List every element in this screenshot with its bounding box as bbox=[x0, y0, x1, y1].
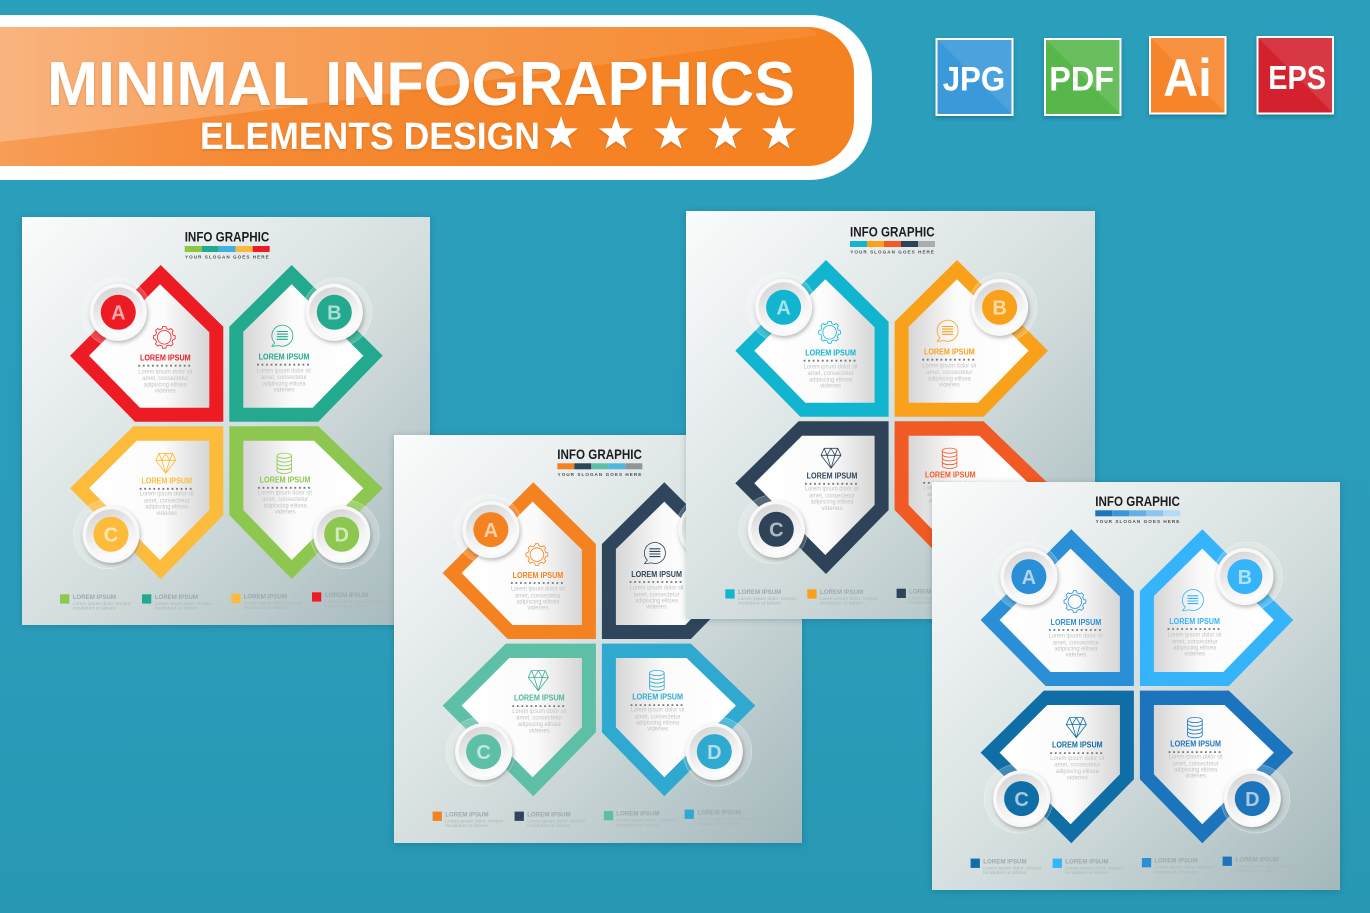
badge A bbox=[82, 278, 151, 347]
icon: gear bbox=[153, 326, 175, 348]
badge: EPS bbox=[1258, 37, 1333, 114]
card heading: INFO GRAPHIC bbox=[1095, 493, 1180, 509]
badge B bbox=[303, 278, 372, 347]
banner subheading: ELEMENTS DESIGN bbox=[200, 116, 540, 158]
petal C text: videnes bbox=[1067, 775, 1088, 781]
card heading: YOUR SLOGAN GOES HERE bbox=[185, 255, 269, 260]
legend: Lorem ipsum dolor, tempor bbox=[738, 596, 796, 601]
petal D text: amet, consectetur bbox=[262, 497, 308, 503]
petal C text: LOREM IPSUM bbox=[141, 476, 192, 485]
petal B text bbox=[922, 348, 977, 388]
petal D text bbox=[1169, 740, 1223, 780]
legend: LOREM IPSUM bbox=[73, 594, 116, 601]
legend bbox=[971, 856, 1294, 875]
legend: Lorem ipsum dolor, tempor bbox=[1154, 865, 1213, 870]
petal D bbox=[895, 421, 1048, 574]
petal A text: Lorem ipsum dolor sit bbox=[1049, 634, 1103, 640]
icon: database bbox=[277, 453, 292, 474]
legend: LOREM IPSUM bbox=[325, 592, 368, 599]
legend: LOREM IPSUM bbox=[1236, 856, 1279, 863]
petal A text: amet, consectetur bbox=[1053, 640, 1099, 646]
petal A text: Lorem ipsum dolor sit bbox=[138, 369, 193, 375]
legend: LOREM IPSUM bbox=[738, 589, 781, 596]
petal A text: Lorem ipsum dolor sit bbox=[804, 364, 858, 370]
icon: gear bbox=[819, 321, 840, 343]
badge B: B bbox=[1238, 567, 1252, 589]
badge C bbox=[739, 495, 808, 564]
petal B text: adipiscing elitsea bbox=[1173, 646, 1217, 652]
legend bbox=[725, 588, 967, 606]
icon: diamond bbox=[528, 671, 548, 691]
petal B text: LOREM IPSUM bbox=[924, 348, 975, 357]
petal C text bbox=[512, 694, 567, 734]
badge A bbox=[454, 495, 523, 564]
badge C: C bbox=[1014, 789, 1029, 811]
badge D: D bbox=[707, 742, 722, 764]
petal B text: videnes bbox=[646, 605, 667, 611]
legend: LOREM IPSUM bbox=[983, 858, 1027, 865]
icon: gear bbox=[526, 544, 548, 565]
petal D text: adipiscing elitsea bbox=[264, 503, 307, 509]
petal B text: Lorem ipsum dolor sit bbox=[630, 586, 684, 592]
icon: diamond bbox=[156, 453, 176, 473]
legend: Lorem ipsum dolor, tempor bbox=[983, 865, 1042, 870]
petal A bbox=[443, 482, 596, 639]
badge C bbox=[984, 764, 1053, 833]
petal B text: Lorem ipsum dolor sit bbox=[1168, 633, 1222, 639]
banner gloss bbox=[0, 27, 818, 142]
petal D text: videnes bbox=[274, 509, 296, 515]
petal B bbox=[1140, 529, 1293, 686]
petal C text: amet, consectetur bbox=[516, 716, 562, 722]
legend: incididunt ut labore bbox=[155, 606, 198, 611]
badge A bbox=[747, 273, 816, 342]
petal D text: amet, consectetur bbox=[635, 714, 681, 720]
petal C text: LOREM IPSUM bbox=[514, 694, 565, 703]
legend: incididunt ut labore bbox=[983, 870, 1027, 875]
petal A bbox=[981, 529, 1134, 686]
icon: speech bubble bbox=[272, 325, 293, 346]
legend: Lorem ipsum dolor, tempor bbox=[1236, 863, 1294, 868]
legend: LOREM IPSUM bbox=[1065, 858, 1109, 865]
petal A text: adipiscing elitsea bbox=[1054, 647, 1098, 653]
legend: incididunt ut labore bbox=[738, 601, 781, 606]
petal C text: amet, consectetur bbox=[1054, 763, 1100, 769]
petal A text: LOREM IPSUM bbox=[1051, 618, 1102, 627]
petal C text: LOREM IPSUM bbox=[1052, 741, 1103, 750]
petal B text: videnes bbox=[274, 387, 294, 393]
petal B text bbox=[1168, 617, 1222, 658]
badge A: A bbox=[484, 520, 498, 542]
legend: LOREM IPSUM bbox=[244, 593, 287, 600]
petal C text: Lorem ipsum dolor sit bbox=[512, 709, 567, 715]
petal D text: LOREM IPSUM bbox=[260, 475, 311, 484]
card heading bbox=[185, 229, 270, 260]
petal D text: amet, consectetur bbox=[1173, 761, 1219, 767]
petal A text: LOREM IPSUM bbox=[513, 571, 564, 580]
petal D text bbox=[631, 693, 685, 733]
panel: card 4 monochrome blue bbox=[932, 482, 1340, 890]
petal C text: adipiscing elitsea bbox=[810, 500, 854, 506]
badge C bbox=[446, 717, 515, 786]
legend: LOREM IPSUM bbox=[820, 589, 863, 596]
badge: EPS: EPS bbox=[1268, 59, 1326, 96]
badge D bbox=[1221, 764, 1290, 833]
petal B text: Lorem ipsum dolor sit bbox=[922, 363, 977, 369]
petal A text: videnes bbox=[155, 388, 176, 394]
petal A bbox=[735, 260, 889, 417]
badge C bbox=[74, 500, 142, 569]
badge D bbox=[683, 717, 752, 786]
badge A: A bbox=[776, 298, 791, 320]
legend: Lorem ipsum dolor, tempor bbox=[698, 816, 756, 821]
petal B text: videnes bbox=[1184, 652, 1205, 658]
badge D: D bbox=[334, 524, 349, 546]
petal A text bbox=[138, 354, 193, 394]
petal C bbox=[70, 426, 223, 579]
legend: LOREM IPSUM bbox=[909, 588, 952, 595]
badge B: B bbox=[327, 303, 342, 325]
petal D bbox=[1140, 691, 1293, 843]
legend: incididunt ut labore bbox=[1154, 869, 1198, 874]
petal C text bbox=[1050, 741, 1105, 781]
petal C text: amet, consectetur bbox=[809, 493, 855, 499]
petal C text: Lorem ipsum dolor sit bbox=[805, 487, 859, 493]
legend: incididunt ut labore bbox=[616, 822, 660, 827]
file format badges bbox=[934, 36, 1336, 120]
petal B bbox=[229, 265, 383, 422]
legend: incididunt ut labore bbox=[909, 600, 952, 605]
petal D text bbox=[258, 475, 312, 515]
badge B bbox=[1213, 542, 1282, 611]
badge A: A bbox=[1022, 567, 1036, 589]
legend: Lorem ipsum dolor, tempor bbox=[325, 599, 383, 604]
petal B bbox=[895, 260, 1048, 417]
petal A text: LOREM IPSUM bbox=[140, 354, 191, 363]
petal B text: adipiscing elitsea bbox=[928, 376, 971, 382]
five star rating bbox=[544, 116, 796, 149]
petal C text: Lorem ipsum dolor sit bbox=[140, 492, 194, 498]
legend: LOREM IPSUM bbox=[698, 809, 741, 816]
petal A text: LOREM IPSUM bbox=[805, 349, 856, 358]
icon: gear bbox=[1064, 591, 1086, 612]
petal D text: adipiscing elitsea bbox=[1174, 768, 1218, 774]
petal A text: adipiscing elitsea bbox=[144, 382, 187, 388]
icon: diamond bbox=[821, 448, 841, 468]
banner orange fill bbox=[0, 27, 854, 166]
petal A text: adipiscing elitsea bbox=[516, 600, 560, 606]
legend: Lorem ipsum dolor, tempor bbox=[445, 818, 504, 823]
legend bbox=[433, 809, 756, 828]
icon: database bbox=[1188, 717, 1202, 738]
petal A text: adipiscing elitsea bbox=[809, 377, 853, 383]
badge C: C bbox=[769, 519, 784, 541]
petal C text: videnes bbox=[156, 511, 177, 517]
petal B bbox=[602, 482, 755, 639]
card heading bbox=[850, 224, 935, 255]
badge: PDF bbox=[1045, 39, 1120, 115]
legend: incididunt ut labore bbox=[1065, 870, 1109, 875]
petal A bbox=[70, 265, 223, 422]
icon: database bbox=[942, 448, 957, 468]
petal D text: adipiscing elitsea bbox=[636, 721, 680, 727]
icon: diamond bbox=[1066, 718, 1086, 738]
petal B text: amet, consectetur bbox=[926, 370, 972, 376]
petal D text: Lorem ipsum dolor sit bbox=[923, 485, 978, 491]
badge B: B bbox=[992, 298, 1007, 320]
petal D text: videnes bbox=[940, 504, 961, 510]
legend: Lorem ipsum dolor, tempor bbox=[820, 596, 878, 601]
petal D text: LOREM IPSUM bbox=[925, 470, 976, 479]
petal B text: LOREM IPSUM bbox=[1169, 617, 1220, 626]
legend: incididunt ut labore bbox=[1236, 868, 1279, 873]
card heading: INFO GRAPHIC bbox=[185, 229, 269, 245]
card heading: YOUR SLOGAN GOES HERE bbox=[1096, 519, 1179, 524]
petal C text: adipiscing elitsea bbox=[518, 722, 561, 728]
petal D text: adipiscing elitsea bbox=[929, 498, 972, 504]
petal C text: adipiscing elitsea bbox=[1056, 769, 1099, 775]
badge: JPG bbox=[936, 39, 1012, 115]
petal A text bbox=[511, 571, 565, 612]
petal D bbox=[602, 644, 755, 796]
badge: PDF: PDF bbox=[1049, 60, 1114, 98]
petal C text bbox=[140, 476, 194, 517]
petal C text bbox=[805, 471, 860, 512]
legend: incididunt ut labore bbox=[325, 604, 368, 609]
petal D text: videnes bbox=[1185, 774, 1206, 780]
petal D text: Lorem ipsum dolor sit bbox=[631, 708, 685, 714]
badge D bbox=[310, 500, 379, 569]
card heading: INFO GRAPHIC bbox=[557, 446, 642, 462]
legend: incididunt ut labore bbox=[698, 821, 741, 826]
badge A: A bbox=[111, 303, 126, 325]
legend: LOREM IPSUM bbox=[155, 594, 198, 601]
petal B text bbox=[257, 353, 312, 393]
card heading: YOUR SLOGAN GOES HERE bbox=[850, 250, 934, 255]
legend: Lorem ipsum dolor, tempor bbox=[909, 595, 967, 600]
legend: Lorem ipsum dolor, tempor bbox=[244, 600, 302, 605]
icon: speech bubble bbox=[644, 542, 665, 564]
petal C text: videnes bbox=[529, 728, 550, 734]
petal B text: adipiscing elitsea bbox=[635, 599, 679, 605]
petal B text: LOREM IPSUM bbox=[631, 570, 682, 579]
petal D text: Lorem ipsum dolor sit bbox=[1169, 755, 1223, 761]
petal B text: amet, consectetur bbox=[1172, 639, 1218, 645]
petal B text: adipiscing elitsea bbox=[262, 381, 306, 387]
badge D: D bbox=[1245, 789, 1260, 811]
petal B text: LOREM IPSUM bbox=[259, 353, 310, 362]
banner white outline bbox=[0, 15, 872, 180]
icon: speech bubble bbox=[1182, 589, 1203, 611]
badge: Ai bbox=[1150, 37, 1226, 114]
petal B text: videnes bbox=[939, 382, 960, 388]
petal B text: amet, consectetur bbox=[634, 592, 680, 598]
icon: speech bubble bbox=[937, 320, 958, 341]
badge: JPG: JPG bbox=[943, 60, 1005, 98]
badge C: C bbox=[104, 524, 118, 546]
panel: card 1 red teal yellow green bbox=[22, 217, 430, 625]
petal C text: videnes bbox=[821, 506, 842, 512]
legend: Lorem ipsum dolor, tempor bbox=[1065, 865, 1124, 870]
petal D text: LOREM IPSUM bbox=[632, 693, 683, 702]
legend: incididunt ut labore bbox=[244, 605, 287, 610]
petal A text: videnes bbox=[820, 383, 841, 389]
banner: minimal infographics title bbox=[0, 15, 872, 180]
petal C text: LOREM IPSUM bbox=[807, 471, 858, 480]
petal D bbox=[229, 426, 383, 579]
legend: incididunt ut labore bbox=[527, 823, 571, 828]
legend bbox=[60, 592, 383, 611]
petal A text: amet, consectetur bbox=[515, 593, 561, 599]
legend: incididunt ut labore bbox=[445, 823, 489, 828]
banner heading: MINIMAL INFOGRAPHICS bbox=[47, 50, 795, 119]
petal D text: LOREM IPSUM bbox=[1170, 740, 1221, 749]
petal A text: videnes bbox=[1065, 653, 1086, 659]
petal D text bbox=[923, 470, 978, 510]
petal C bbox=[981, 691, 1134, 843]
legend: LOREM IPSUM bbox=[445, 811, 489, 818]
petal A text bbox=[804, 349, 858, 389]
badge A bbox=[992, 542, 1061, 611]
panel: card 2 orange navy mint blue bbox=[394, 435, 802, 843]
card heading bbox=[557, 446, 642, 477]
legend: Lorem ipsum dolor, tempor bbox=[527, 818, 586, 823]
panel: card 3 cyan amber navy vermilion bbox=[686, 211, 1095, 619]
petal B text: amet, consectetur bbox=[261, 375, 307, 381]
petal A text: videnes bbox=[527, 606, 548, 612]
petal B text bbox=[630, 570, 684, 611]
petal A text bbox=[1049, 618, 1103, 659]
legend: Lorem ipsum dolor, tempor bbox=[73, 601, 131, 606]
legend: LOREM IPSUM bbox=[616, 811, 660, 818]
badge B bbox=[675, 495, 744, 564]
badge B: B bbox=[700, 520, 714, 542]
badge B bbox=[968, 273, 1037, 342]
card heading: YOUR SLOGAN GOES HERE bbox=[558, 472, 641, 477]
petal D text: videnes bbox=[647, 727, 668, 733]
petal C bbox=[735, 421, 889, 574]
badge C: C bbox=[476, 742, 491, 764]
legend: incididunt ut labore bbox=[820, 601, 863, 606]
petal D text: Lorem ipsum dolor sit bbox=[258, 490, 312, 496]
petal A text: amet, consectetur bbox=[808, 371, 854, 377]
legend: LOREM IPSUM bbox=[1154, 858, 1198, 865]
petal D text: amet, consectetur bbox=[927, 492, 973, 498]
petal B text: Lorem ipsum dolor sit bbox=[257, 368, 311, 374]
petal A text: amet, consectetur bbox=[142, 376, 188, 382]
petal C text: amet, consectetur bbox=[144, 498, 190, 504]
petal C text: adipiscing elitsea bbox=[145, 505, 189, 511]
icon: database bbox=[650, 670, 664, 691]
petal C text: Lorem ipsum dolor sit bbox=[1050, 756, 1105, 762]
legend: Lorem ipsum dolor, tempor bbox=[155, 601, 213, 606]
legend: LOREM IPSUM bbox=[527, 811, 571, 818]
card heading bbox=[1095, 493, 1180, 524]
card heading: INFO GRAPHIC bbox=[850, 224, 935, 240]
petal C bbox=[443, 644, 596, 796]
badge: Ai: Ai bbox=[1163, 49, 1212, 108]
legend: Lorem ipsum dolor, tempor bbox=[616, 818, 675, 823]
legend: incididunt ut labore bbox=[73, 606, 116, 611]
petal A text: Lorem ipsum dolor sit bbox=[511, 587, 565, 593]
